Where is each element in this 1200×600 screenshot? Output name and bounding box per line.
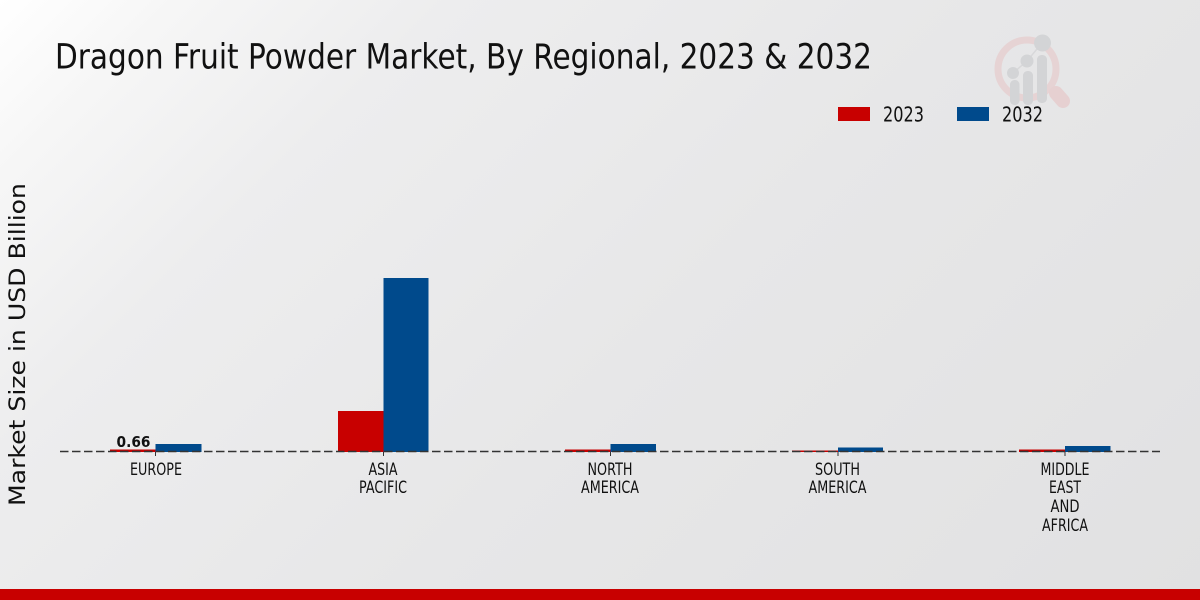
label: Asia Pacific: ASIA xyxy=(368,460,398,479)
label: Asia Pacific: PACIFIC xyxy=(359,478,407,497)
baseline xyxy=(60,450,1160,452)
legend item: 2023 xyxy=(838,102,924,126)
label: South America: AMERICA xyxy=(808,478,867,497)
bars: Europe xyxy=(110,444,202,452)
label: North America: NORTH xyxy=(588,460,632,479)
label: South America: SOUTH xyxy=(815,460,860,479)
data label: Europe 2023: 0.66 xyxy=(116,433,150,451)
label: Asia Pacific xyxy=(359,460,407,497)
label: North America xyxy=(581,460,640,497)
bars: Asia Pacific xyxy=(338,278,428,452)
footer bar xyxy=(0,589,1200,600)
label: Middle East and Africa: AFRICA xyxy=(1042,516,1089,535)
label: Middle East and Africa: EAST xyxy=(1049,478,1082,497)
label: North America: AMERICA xyxy=(581,478,640,497)
legend item: 2023: 2023 xyxy=(883,102,924,126)
icon: watermark logo xyxy=(998,34,1063,105)
x axis labels xyxy=(130,460,1090,535)
title: Dragon Fruit Powder Market, By Regional, 2023 & 2032 xyxy=(55,38,872,78)
bars: Middle East and Africa xyxy=(1019,446,1110,452)
legend xyxy=(838,102,1043,126)
legend item: 2032 xyxy=(957,102,1043,126)
label: Middle East and Africa: MIDDLE xyxy=(1040,460,1090,479)
label: South America xyxy=(808,460,867,497)
bars: North America xyxy=(565,444,656,452)
label: Middle East and Africa: AND xyxy=(1050,497,1080,516)
bar chart xyxy=(60,278,1160,456)
legend item: 2032: 2032 xyxy=(1002,102,1043,126)
bars: South America xyxy=(792,448,883,452)
y axis label: Market Size in USD Billion xyxy=(5,183,31,506)
label: Middle East and Africa xyxy=(1040,460,1090,535)
label: Europe: EUROPE xyxy=(130,460,182,479)
